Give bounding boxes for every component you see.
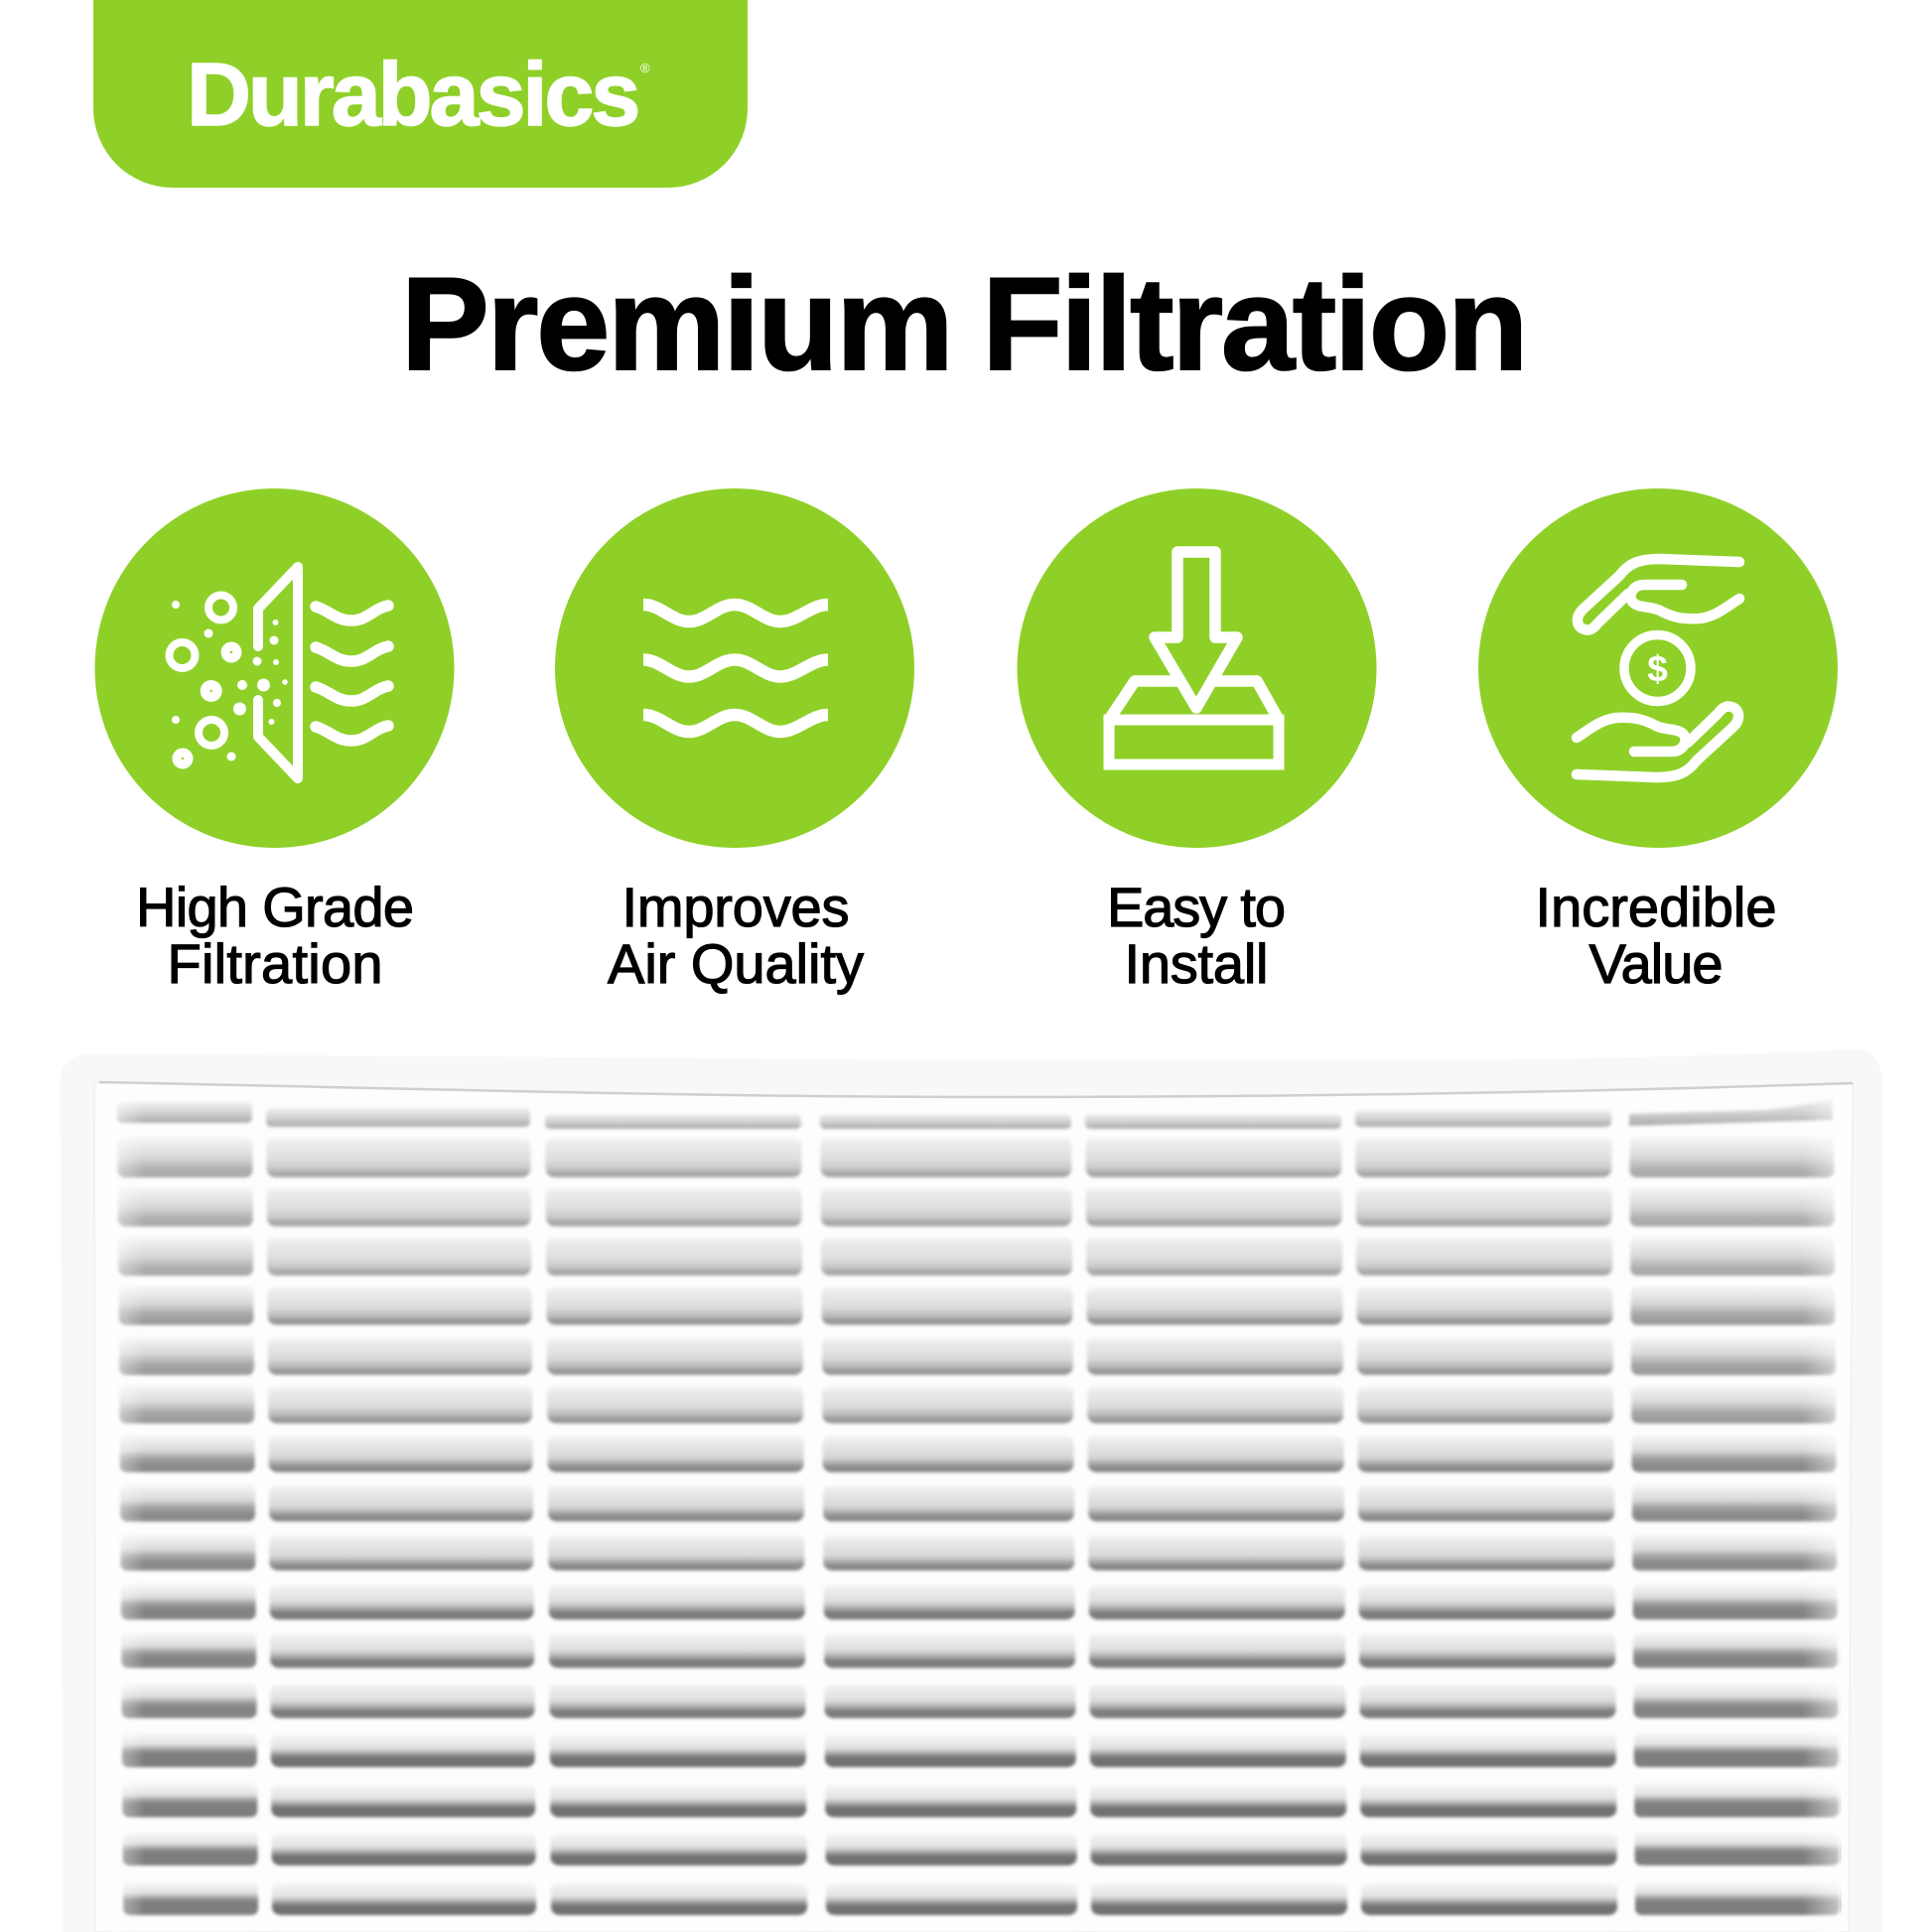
filter photo [61, 1049, 1882, 1932]
icon: arrow into box [1017, 488, 1376, 848]
label: improves air quality [608, 876, 864, 995]
label: high grade filtration: High Grade [136, 876, 414, 938]
label: incredible value: Incredible [1535, 876, 1777, 938]
filter pleats [117, 1098, 1840, 1932]
registered mark: ® [640, 61, 650, 75]
icon: hands and dollar coin: $ [1647, 648, 1668, 689]
feature: incredible value [1478, 488, 1838, 995]
label: easy to install: Easy to [1107, 876, 1286, 938]
feature: high grade filtration [95, 488, 455, 995]
icon: hands and dollar coin [1478, 488, 1838, 848]
brand name: Durabasics [187, 46, 637, 145]
logo badge [93, 0, 748, 188]
feature: easy to install [1017, 488, 1376, 995]
feature: improves air quality [555, 488, 914, 995]
filter inner panel [94, 1082, 1853, 1932]
label: incredible value [1535, 876, 1777, 995]
label: high grade filtration: Filtration [167, 932, 383, 995]
icon: air waves [555, 488, 914, 848]
label: incredible value: Value [1588, 932, 1724, 995]
label: improves air quality: Air Quality [608, 932, 864, 995]
label: easy to install: Install [1124, 932, 1269, 995]
title: Premium Filtration [401, 251, 1526, 398]
label: improves air quality: Improves [621, 876, 850, 938]
label: easy to install [1107, 876, 1286, 995]
filter outer frame [61, 1049, 1882, 1932]
label: high grade filtration [136, 876, 414, 995]
icon: filter with particles and airflow [95, 488, 455, 848]
